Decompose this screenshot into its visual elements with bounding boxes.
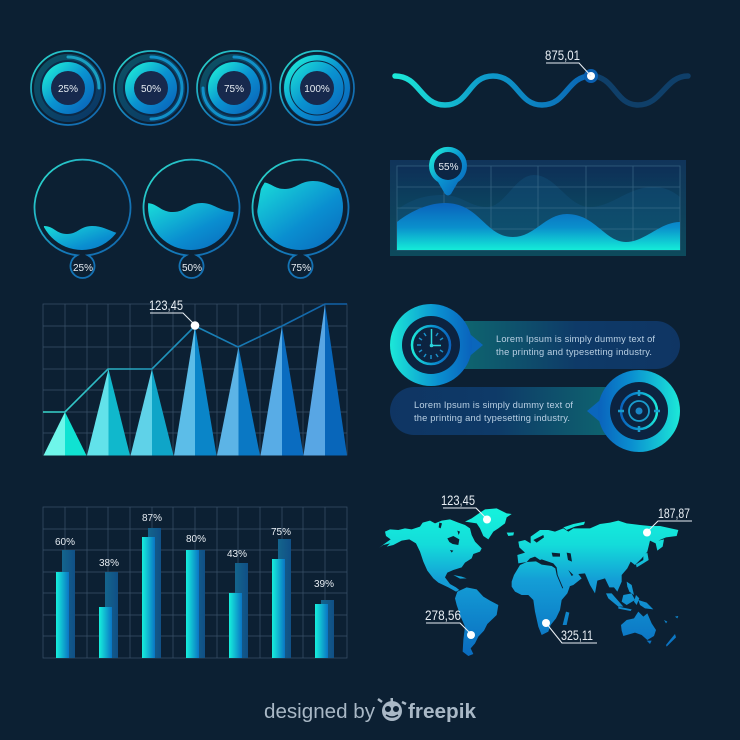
map callout: 123,45 (441, 492, 491, 524)
triangle chart: 123,45 (149, 297, 183, 313)
water gauge: 75%: 75% (291, 263, 311, 274)
callout: clock (390, 304, 680, 386)
inland seas and lakes (439, 523, 573, 576)
bar labels: 39% (314, 579, 334, 590)
africa (512, 561, 570, 635)
south america (455, 587, 498, 656)
water gauge: 25%: 25% (73, 263, 93, 274)
callout: target: the printing and typesetting industry. (414, 413, 570, 423)
bar labels: 80% (186, 534, 206, 545)
bar labels: 43% (227, 549, 247, 560)
wave line chart: 875,01 (545, 47, 580, 63)
triangle chart (43, 297, 347, 456)
area chart panel (390, 160, 686, 256)
callout: target: Lorem Ipsum is simply dummy text of (414, 400, 573, 410)
japan (636, 553, 649, 567)
southeast asia (606, 593, 623, 607)
progress ring: 50%: 50% (141, 84, 161, 95)
north america (379, 519, 482, 592)
bar labels: 60% (55, 537, 75, 548)
water gauge: 50%: 50% (182, 263, 202, 274)
pin marker: 55% (429, 147, 467, 196)
bar labels: 87% (142, 513, 162, 524)
pin marker: 55%: 55% (438, 162, 459, 173)
water gauge: 75% (250, 160, 350, 278)
footer attribution: freepik (408, 701, 477, 723)
bar labels: 75% (271, 527, 291, 538)
map callout: 187,87 (643, 505, 692, 536)
progress ring: 100%: 100% (304, 84, 330, 95)
novaya zemlya (563, 522, 585, 530)
callout: clock: Lorem Ipsum is simply dummy text of (496, 334, 655, 344)
new zealand (666, 634, 676, 647)
map callout: 278,56 (425, 607, 475, 639)
australia (621, 612, 656, 640)
progress ring: 100% (280, 51, 354, 125)
wave line chart (395, 47, 688, 105)
water gauge: 50% (140, 160, 240, 278)
icon: freepik logo (378, 698, 406, 721)
back wave (398, 175, 680, 242)
world map (379, 492, 692, 656)
eurasia (517, 521, 678, 593)
map callout: 325,11 (542, 619, 597, 643)
progress ring: 25%: 25% (58, 84, 78, 95)
bar labels: 38% (99, 558, 119, 569)
map callout: 278,56: 278,56 (425, 607, 461, 623)
progress ring: 75%: 75% (224, 84, 244, 95)
progress ring: 75% (197, 51, 271, 125)
bars (56, 528, 334, 658)
iceland (507, 532, 514, 536)
progress ring: 50% (114, 51, 188, 125)
continents (379, 508, 678, 656)
water gauge: 25% (35, 160, 130, 278)
caribbean (453, 575, 467, 579)
map callout: 325,11: 325,11 (561, 627, 593, 643)
bar labels (55, 513, 334, 590)
callout: clock: the printing and typesetting industry. (496, 347, 652, 357)
map callout: 187,87: 187,87 (658, 505, 690, 521)
progress ring: 25% (31, 51, 105, 125)
icon: clock (412, 326, 450, 364)
map callout: 123,45: 123,45 (441, 492, 475, 508)
triangles (44, 304, 347, 456)
icon: target (618, 390, 660, 432)
greenland (465, 508, 512, 539)
bar chart (43, 507, 347, 658)
callout: target (390, 370, 680, 452)
madagascar (563, 612, 569, 625)
footer attribution: designed by (264, 701, 375, 723)
footer attribution (264, 698, 477, 723)
front wave (397, 203, 680, 250)
